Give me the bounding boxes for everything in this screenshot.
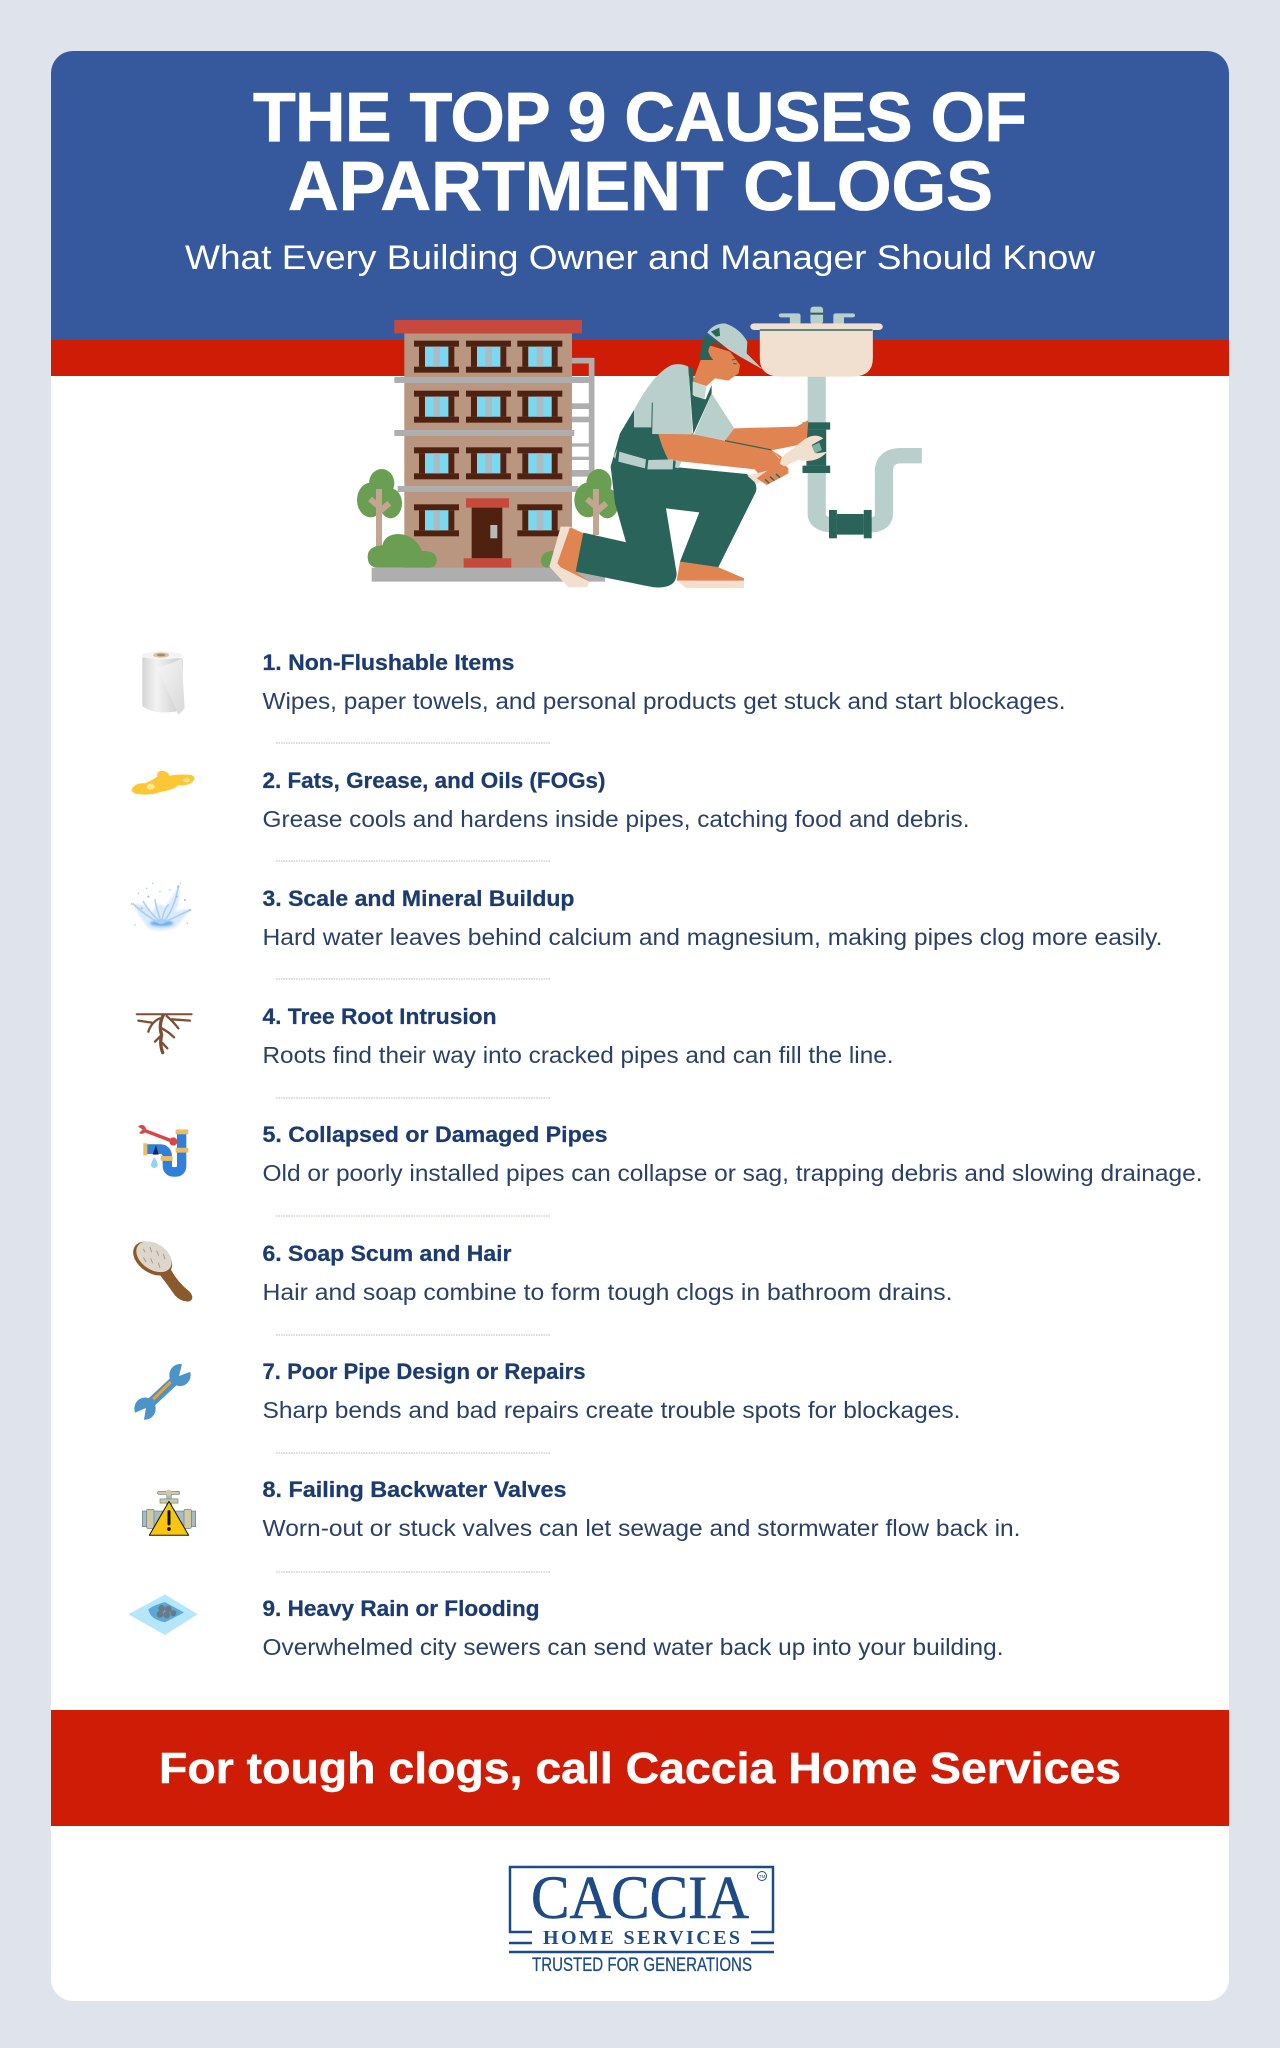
wrench — [747, 436, 827, 484]
icon: paper towel roll — [142, 651, 185, 715]
list of causes — [127, 650, 1202, 1660]
heading 1: 1. Non-Flushable Items — [262, 650, 514, 675]
description 7: Sharp bends and bad repairs create trouble spots for blockages. — [262, 1397, 960, 1423]
hair — [700, 335, 727, 360]
hand — [757, 450, 788, 485]
icon: flood drain — [128, 1595, 198, 1635]
heading 8: 8. Failing Backwater Valves — [262, 1477, 566, 1502]
heading 5: 5. Collapsed or Damaged Pipes — [262, 1122, 608, 1147]
description 4: Roots find their way into cracked pipes and can fill the line. — [262, 1042, 894, 1068]
logo: Caccia Home Services: CACCIA — [531, 1865, 749, 1932]
cap — [707, 323, 763, 369]
belt — [613, 448, 682, 469]
icon: damaged pipe and wrench — [137, 1125, 188, 1172]
icon: wrench — [134, 1361, 193, 1424]
call to action text: For tough clogs, call Caccia Home Services — [159, 1744, 1121, 1793]
apartment building — [372, 320, 605, 582]
logo: Caccia Home Services — [509, 1865, 774, 1976]
description 3: Hard water leaves behind calcium and magnesium, making pipes clog more easily. — [262, 924, 1162, 950]
trees and bushes — [357, 469, 619, 568]
illustration: apartment building and plumber — [357, 307, 922, 588]
item 5 — [137, 1122, 1202, 1186]
collar — [693, 382, 707, 399]
item 8 — [142, 1477, 1021, 1541]
front foot — [677, 562, 744, 582]
item 3 — [131, 883, 1162, 950]
heading 6: 6. Soap Scum and Hair — [262, 1241, 512, 1266]
far arm — [725, 420, 808, 450]
subtitle: What Every Building Owner and Manager Should Know — [185, 239, 1095, 277]
red call to action band — [51, 1710, 1229, 1826]
item 2 — [132, 768, 970, 832]
icon: tree roots — [137, 1014, 192, 1053]
icon: backwater valve warning — [142, 1490, 196, 1535]
description 9: Overwhelmed city sewers can send water back up into your building. — [262, 1634, 1004, 1660]
icon: water splash — [131, 883, 192, 930]
neck and face — [693, 345, 740, 386]
item 6 — [127, 1234, 952, 1305]
heading 7: 7. Poor Pipe Design or Repairs — [262, 1359, 586, 1384]
icon: hair brush — [127, 1234, 192, 1302]
logo: Caccia Home Services: HOME SERVICES — [543, 1927, 740, 1949]
title line 2: APARTMENT CLOGS — [288, 147, 993, 225]
item 7 — [134, 1359, 960, 1424]
plumber — [549, 323, 827, 588]
header text — [185, 78, 1095, 277]
title line 1: THE TOP 9 CAUSES OF — [253, 78, 1027, 156]
near arm — [658, 434, 788, 485]
description 8: Worn-out or stuck valves can let sewage and stormwater flow back in. — [262, 1515, 1020, 1541]
overalls — [576, 410, 756, 588]
description 6: Hair and soap combine to form tough clogs in bathroom drains. — [262, 1279, 952, 1305]
description 1: Wipes, paper towels, and personal products get stuck and start blockages. — [262, 688, 1066, 714]
item 1 — [142, 650, 1065, 715]
description 2: Grease cools and hardens inside pipes, catching food and debris. — [262, 806, 970, 832]
back foot — [549, 527, 589, 587]
shirt — [634, 364, 693, 435]
sink and pipes — [750, 307, 922, 538]
panel: blue header band — [51, 51, 1229, 341]
logo: Caccia Home Services: TM — [759, 1874, 765, 1879]
description 5: Old or poorly installed pipes can collapse or sag, trapping debris and slowing drainage. — [262, 1160, 1202, 1186]
heading 4: 4. Tree Root Intrusion — [262, 1004, 496, 1029]
heading 2: 2. Fats, Grease, and Oils (FOGs) — [262, 768, 606, 793]
heading 9: 9. Heavy Rain or Flooding — [262, 1596, 540, 1621]
logo: Caccia Home Services: TRUSTED FOR GENERATIONS — [532, 1954, 752, 1976]
item 4 — [137, 1004, 894, 1068]
item 9 — [128, 1595, 1004, 1660]
red stripe — [51, 340, 1229, 376]
icon: grease puddle — [132, 771, 194, 795]
overall strap and bib — [688, 367, 712, 434]
heading 3: 3. Scale and Mineral Buildup — [262, 886, 574, 911]
shirt right side — [694, 393, 734, 441]
